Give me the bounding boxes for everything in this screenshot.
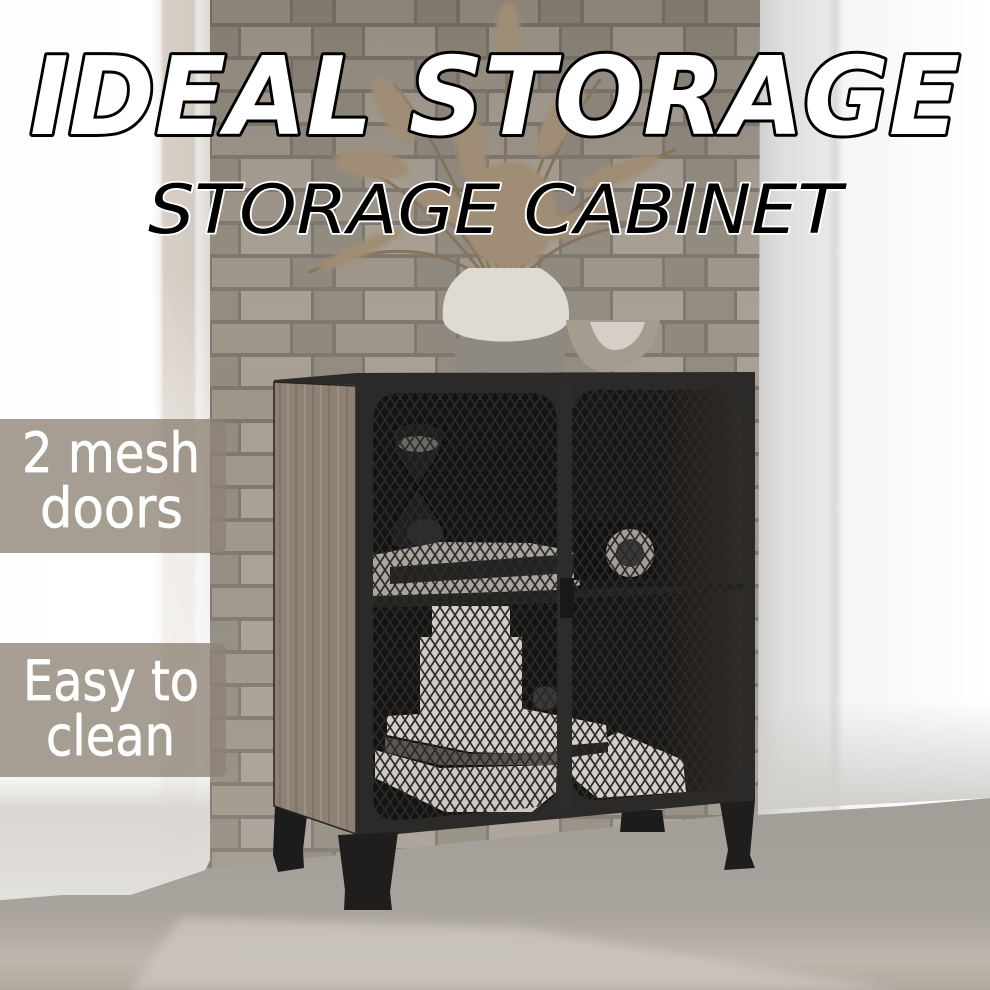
upper shelf — [373, 590, 557, 608]
title: IDEAL STORAGE — [30, 35, 960, 160]
callout: 2 mesh doors: doors — [40, 476, 183, 540]
shelf contents — [373, 422, 742, 812]
books lower — [387, 708, 608, 755]
front frame — [356, 374, 755, 838]
left door interior — [373, 393, 557, 820]
wooden side panel — [274, 382, 356, 834]
floor light streak — [130, 918, 900, 990]
back legs — [273, 805, 307, 872]
callout: 2 mesh doors — [0, 419, 226, 553]
hourglass — [390, 422, 446, 552]
stems — [310, 10, 675, 272]
callout: 2 mesh doors: 2 mesh — [22, 421, 200, 485]
door centre post and latch — [557, 378, 574, 812]
camera object — [574, 521, 657, 580]
left door mesh — [373, 393, 557, 820]
small glass ball — [533, 686, 557, 710]
callout: easy to clean: clean — [46, 704, 175, 768]
brick wall — [205, 0, 765, 875]
right door interior — [572, 390, 742, 800]
cabinet — [273, 372, 755, 910]
callout: easy to clean — [0, 643, 226, 777]
plumes — [315, 2, 663, 276]
callout: easy to clean: Easy to — [23, 649, 199, 713]
vase — [443, 268, 569, 372]
books upper — [373, 542, 580, 596]
bowl — [566, 320, 660, 372]
white stacked vase — [420, 606, 522, 727]
top — [274, 372, 755, 385]
left curtain — [0, 0, 210, 900]
front legs — [338, 832, 398, 910]
right door mesh — [572, 390, 742, 800]
subtitle: STORAGE CABINET — [148, 171, 847, 250]
dried pampas plant — [310, 2, 675, 276]
floor — [0, 798, 990, 990]
right curtain — [758, 0, 990, 815]
